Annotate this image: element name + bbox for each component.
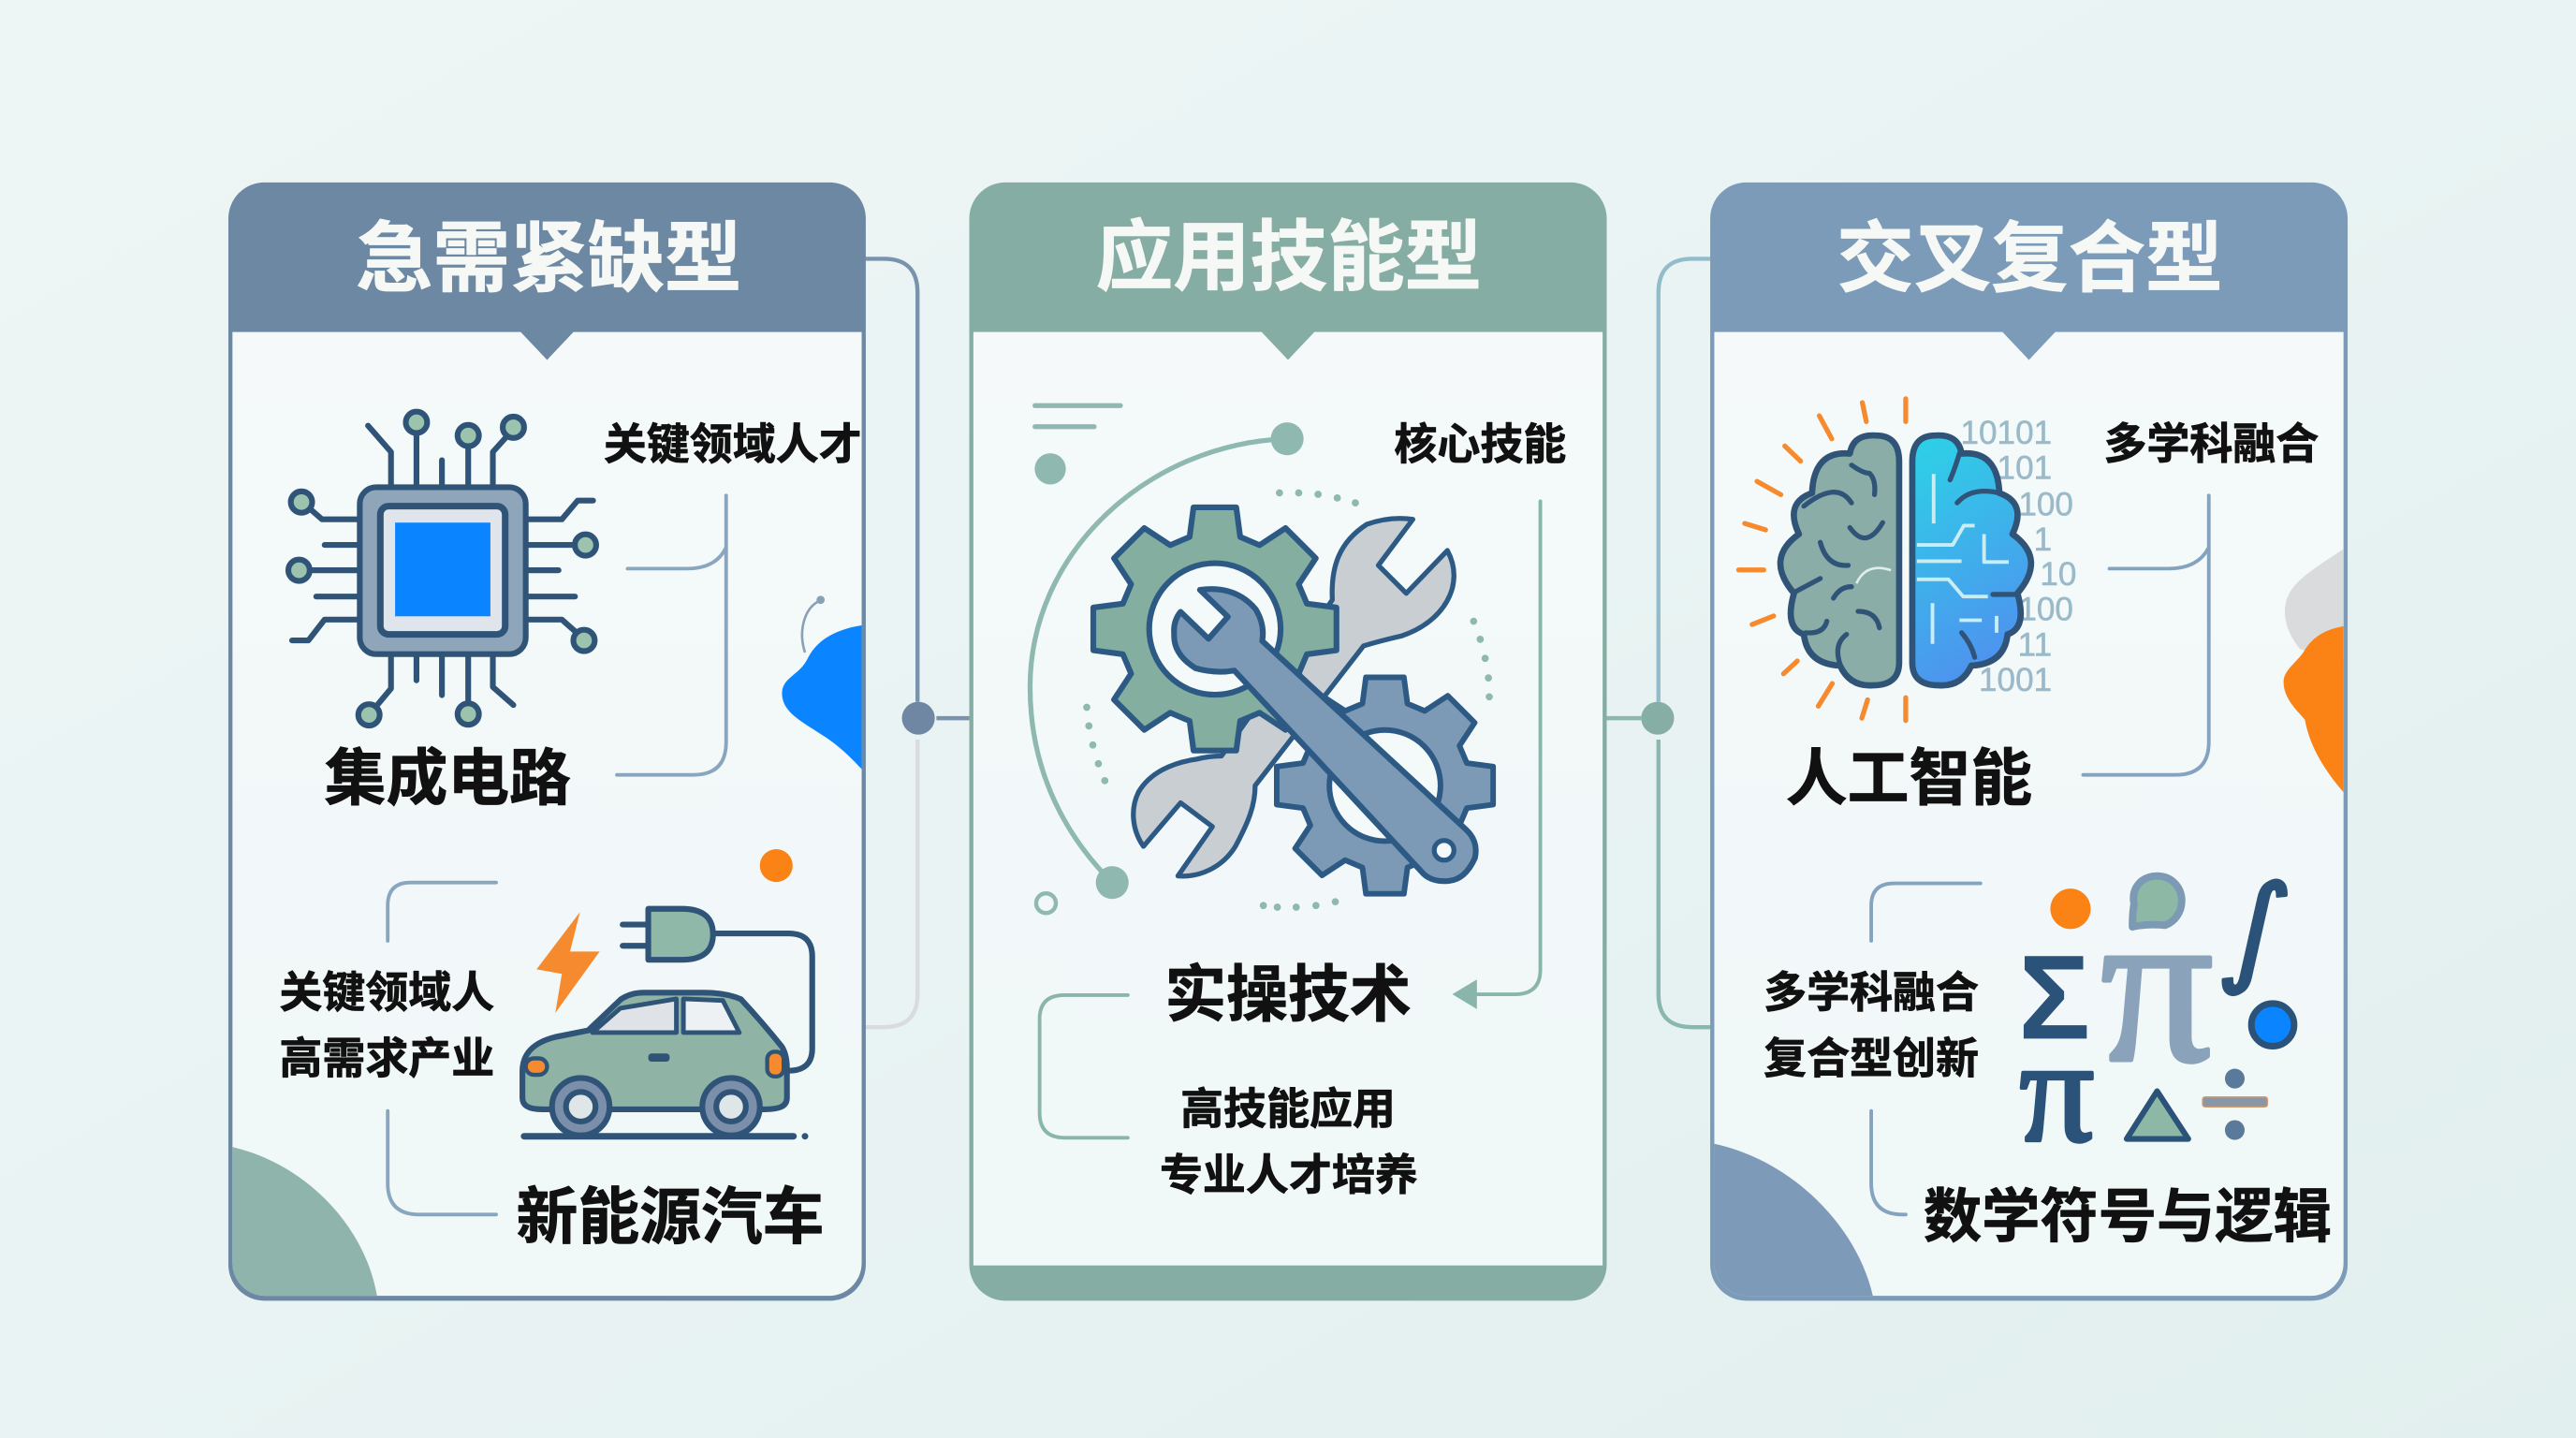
icon: math symbols: π <box>2020 1009 2094 1173</box>
panel body <box>973 332 1603 1266</box>
heading: 应用技能型 <box>1096 214 1482 301</box>
orange dot <box>760 849 793 882</box>
icon: gears and wrenches <box>1093 507 1493 894</box>
label: 新能源汽车: 新能源汽车 <box>517 1182 825 1252</box>
icon: math symbols: ∫ <box>2213 861 2299 998</box>
panel frame and header band <box>1710 183 2348 1300</box>
decorative lines and arc <box>1030 405 1493 913</box>
icon: rays <box>1738 399 1906 721</box>
text block: 高技能应用 专业人才培养: 高技能应用 <box>1180 1085 1396 1134</box>
label: 人工智能: 人工智能 <box>1786 743 2032 813</box>
label: 多学科融合: 多学科融合 <box>2103 419 2319 468</box>
binary digits: 100 <box>2018 592 2073 628</box>
panel: 交叉复合型 <box>1710 183 2348 1300</box>
label: 集成电路: 集成电路 <box>325 743 571 813</box>
text block: 多学科融合 复合型创新: 多学科融合 <box>1764 968 1979 1017</box>
panel: 急需紧缺型 <box>228 183 866 1300</box>
label: 核心技能: 核心技能 <box>1394 420 1566 469</box>
text block: 关键领域人 高需求产业 <box>279 968 494 1082</box>
text block: 高技能应用 专业人才培养: 专业人才培养 <box>1160 1151 1418 1199</box>
corner decoration <box>1714 1144 1873 1296</box>
bracket: electric car <box>388 883 496 1214</box>
icon: math symbols: Σ <box>2018 931 2090 1064</box>
text block: 关键领域人 高需求产业: 高需求产业 <box>279 1034 494 1082</box>
panel frame and header band <box>228 183 866 1300</box>
binary digits: 101 <box>1998 450 2052 487</box>
icon: math symbols: π <box>2100 860 2214 1108</box>
panel body <box>232 332 862 1296</box>
binary digits: 100 <box>2018 486 2073 522</box>
label: 数学符号与逻辑: 数学符号与逻辑 <box>1924 1185 2332 1250</box>
binary digits: 11 <box>2018 626 2052 663</box>
binary digits <box>1961 415 2076 698</box>
heading: 急需紧缺型 <box>356 216 741 302</box>
arrow bracket: core skills to practical technology <box>1453 501 1541 1009</box>
corner decoration <box>232 1147 377 1296</box>
connector: centre panel to right panel <box>1606 258 1710 1027</box>
text block: 多学科融合 复合型创新 <box>1764 968 1979 1082</box>
panel: 应用技能型 <box>970 183 1606 1300</box>
decoration: blue blob <box>782 595 862 770</box>
bracket: math symbols <box>1871 884 1981 1214</box>
connector: left panel to centre panel <box>866 258 970 1027</box>
bracket: practical technology <box>1040 995 1128 1137</box>
binary digits: 1001 <box>1979 662 2052 698</box>
icon: brain <box>1780 435 2031 685</box>
text block: 高技能应用 专业人才培养 <box>1160 1085 1418 1199</box>
panel body <box>1714 332 2344 1296</box>
header pointer <box>2001 330 2056 360</box>
icon: charging plug and cable <box>622 909 812 1071</box>
icon: electric car <box>522 992 809 1139</box>
panel frame, header and footer band <box>970 183 1606 1300</box>
label: 实操技术: 实操技术 <box>1164 960 1412 1029</box>
text block: 关键领域人 高需求产业: 关键领域人 <box>279 968 494 1017</box>
decoration: grey and orange blobs <box>2284 549 2344 792</box>
binary digits: 1 <box>2034 521 2052 558</box>
heading: 交叉复合型 <box>1837 216 2223 302</box>
header pointer <box>1260 330 1316 360</box>
icon: math symbols <box>2018 860 2299 1173</box>
text block: 多学科融合 复合型创新: 复合型创新 <box>1764 1034 1979 1082</box>
binary digits: 10 <box>2040 556 2076 593</box>
icon: lightning bolt <box>536 912 600 1013</box>
header pointer <box>520 330 575 360</box>
icon: microchip <box>288 412 596 726</box>
label: 关键领域人才: 关键领域人才 <box>604 420 862 469</box>
bracket: chip <box>617 495 726 775</box>
bracket: brain <box>2083 495 2209 775</box>
binary digits: 10101 <box>1961 415 2052 451</box>
